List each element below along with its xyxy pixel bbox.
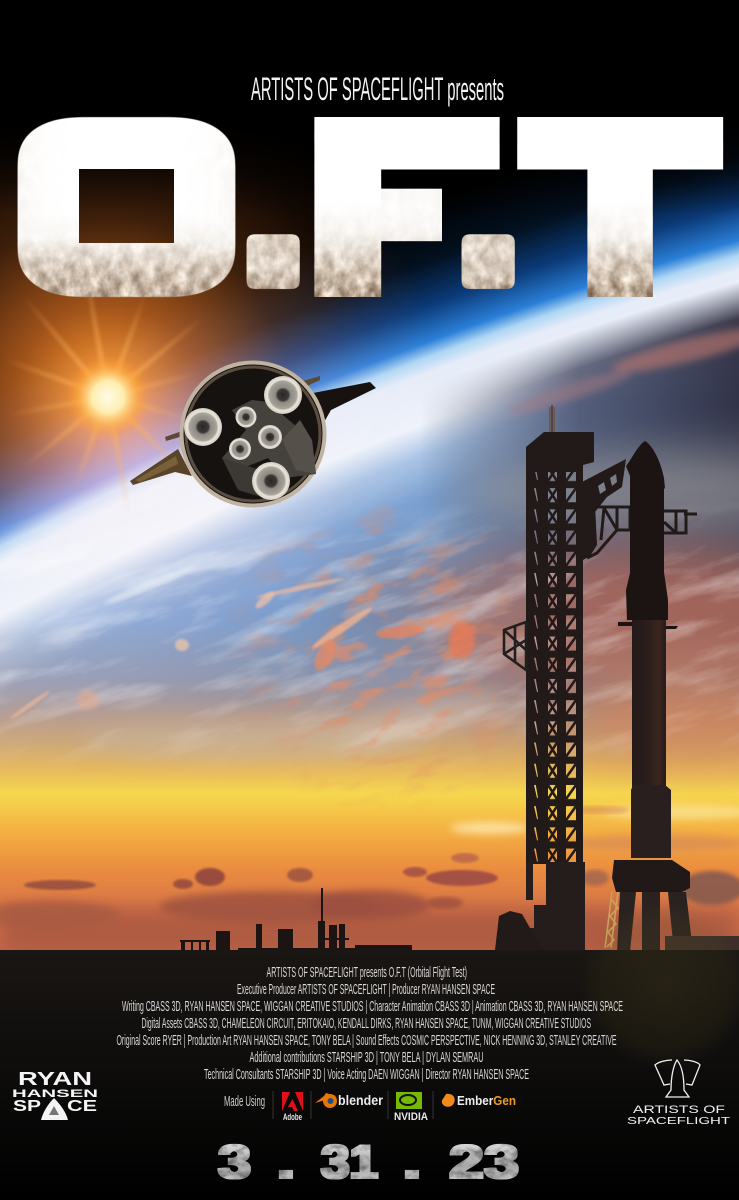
title: O.F.T [17,116,724,298]
title: O.F.T: . [456,113,521,314]
left platform [504,622,526,670]
sun with star rays [4,264,205,516]
spacecraft seen from below [130,362,376,506]
release date: 31 [321,1135,378,1188]
release date [218,1135,519,1188]
launch tower [495,405,630,952]
logo: Ryan Hansen Space: HANSEN [12,1088,98,1100]
Starship on booster stack [605,441,739,952]
title: O.F.T: T [524,83,717,330]
logo: Ryan Hansen Space: RYAN [18,1069,92,1089]
logo: NVIDIA [394,1092,428,1123]
lightning spire [549,407,555,433]
logo: Adobe [282,1092,303,1122]
tower top [526,432,594,472]
right wing [313,382,376,424]
logo: blender: blender [338,1092,383,1108]
logo: EmberGen: EmberGen [457,1093,516,1108]
sunset cloud bank near the horizon [0,853,739,954]
background: space, planet limb and sunset sky [0,151,739,950]
release date: . [402,1135,422,1188]
title: O.F.T: . [240,113,306,314]
upper chopstick arm [580,459,626,512]
logo: Ryan Hansen Space: SP [13,1098,41,1115]
release date: 3 [218,1135,251,1188]
mount legs [617,892,693,952]
sun glow over space [0,60,560,740]
lower arm truss [587,507,630,558]
release date: 23 [449,1135,519,1188]
clouds over the planet [0,504,739,796]
logo: Ryan Hansen Space: CE [67,1098,97,1115]
logo: Artists of Spaceflight: SPACEFLIGHT [627,1115,731,1127]
distant launch site skyline [180,888,412,953]
ground with credits block [0,900,739,1200]
logo: NVIDIA: NVIDIA [394,1111,428,1123]
made using row: Made Using [224,1093,265,1110]
engines [184,376,302,500]
side structure [665,936,739,952]
title: O.F.T: F [302,84,502,331]
release date: . [276,1135,296,1188]
solid lower shaft [526,862,585,952]
ship quick-disconnect arm [664,511,697,533]
logo: Artists of Spaceflight: ARTISTS OF [633,1104,725,1116]
lattice shaft [526,464,583,864]
ship upper stage [626,441,668,620]
booster [632,620,666,788]
left wing [130,449,192,485]
title: O.F.T: O [55,137,198,278]
top darkness fade [0,0,739,215]
credits text: ARTISTS OF SPACEFLIGHT presents O.F.T (Orbital Flight Test) [266,965,467,981]
lower left hump [495,911,545,950]
ladder lattice [605,892,618,948]
logo: blender [315,1092,383,1108]
made using row [224,1091,516,1123]
logo: Artists of Spaceflight [627,1060,731,1127]
logo: Adobe: Adobe [283,1112,302,1122]
credits text: Additional contributions STARSHIP 3D | TONY BELA | DYLAN SEMRAU [250,1050,484,1066]
forward flaps [618,622,678,629]
hull disc [182,362,324,506]
launch mount [612,860,690,892]
logo: Ryan Hansen Space [12,1069,98,1120]
credits text [116,965,623,1083]
